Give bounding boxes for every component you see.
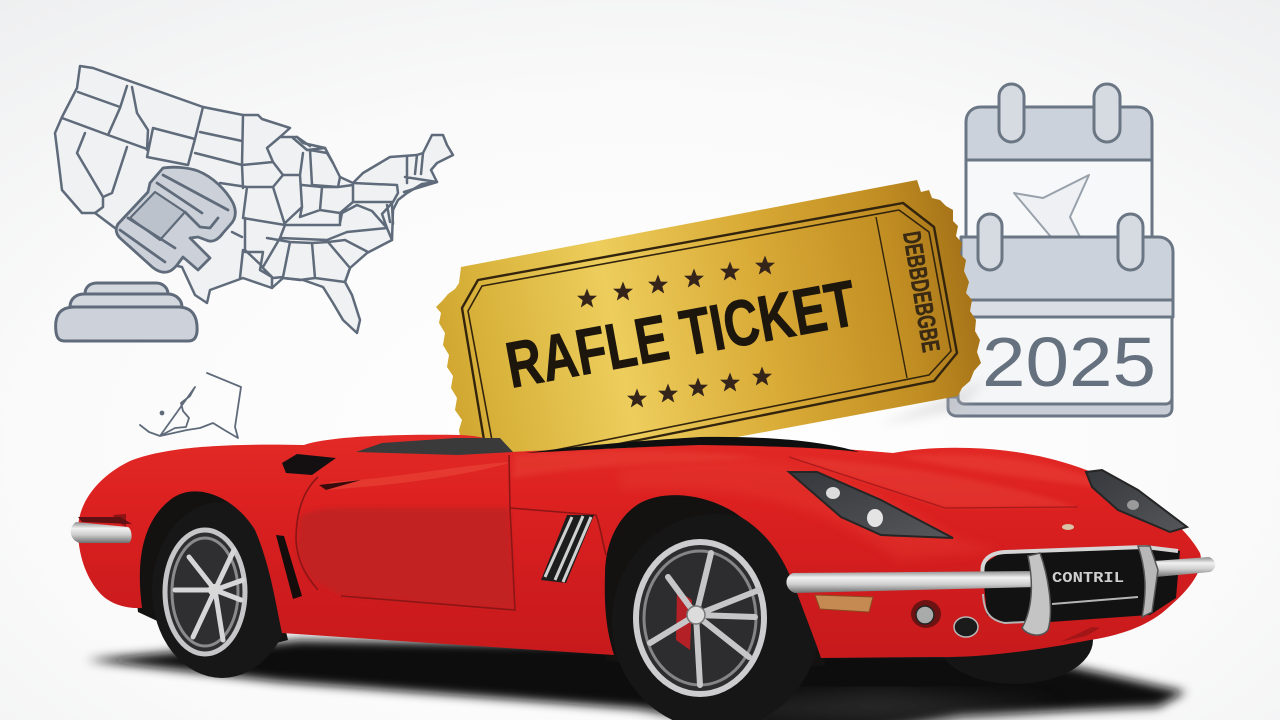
rear wheel bbox=[152, 502, 292, 678]
right headlight bbox=[1086, 470, 1187, 532]
hood emblem bbox=[1062, 524, 1074, 530]
grille lettering: CONTRIL bbox=[1052, 570, 1124, 587]
door handle bbox=[319, 480, 361, 490]
map: contiguous United States bbox=[55, 66, 453, 333]
rear bumper bbox=[71, 522, 132, 543]
icon: gavel sound block bbox=[56, 283, 197, 341]
lower air scoop bbox=[1060, 627, 1100, 642]
car: red convertible bbox=[71, 435, 1215, 720]
grille bbox=[982, 547, 1180, 623]
brake caliper bbox=[676, 590, 692, 650]
ticket: golden raffle ticket bbox=[436, 180, 985, 470]
ticket stub text: DEBBDEBGBE bbox=[897, 229, 945, 354]
icon: calendar arrow mark bbox=[1014, 175, 1089, 237]
icon: upper calendar bbox=[966, 84, 1152, 247]
rear side slit bbox=[276, 535, 302, 599]
car body bbox=[78, 435, 1201, 658]
ticket shadow bbox=[880, 380, 985, 425]
ticket title: RAFLE TICKET bbox=[500, 266, 862, 402]
front left wheel bbox=[612, 514, 820, 720]
front bumper bars bbox=[786, 546, 1215, 635]
windshield frame bbox=[525, 437, 859, 453]
rear vent bbox=[282, 454, 336, 475]
ticket stars bbox=[577, 256, 775, 408]
side vent bbox=[541, 515, 594, 583]
cockpit interior bbox=[356, 438, 513, 455]
fog lamp bbox=[911, 600, 941, 628]
round lower lamp bbox=[954, 617, 978, 637]
turn indicator bbox=[815, 595, 873, 612]
map: Alaska bbox=[140, 373, 241, 438]
front right wheel bbox=[937, 596, 1093, 684]
car shadow on ground bbox=[86, 640, 1186, 720]
ticket body bbox=[436, 180, 981, 470]
rear light recess bbox=[113, 514, 126, 527]
year label: 2025 bbox=[982, 323, 1156, 401]
hood highlights bbox=[620, 459, 1000, 560]
door seam lines bbox=[296, 455, 606, 610]
left headlight bbox=[789, 472, 953, 538]
ticket border lines bbox=[462, 203, 957, 470]
icon: 2025 calendar bbox=[948, 214, 1173, 416]
icon: gavel head bbox=[116, 167, 235, 272]
wheel arch interiors bbox=[130, 482, 826, 680]
door panel bbox=[297, 508, 514, 610]
